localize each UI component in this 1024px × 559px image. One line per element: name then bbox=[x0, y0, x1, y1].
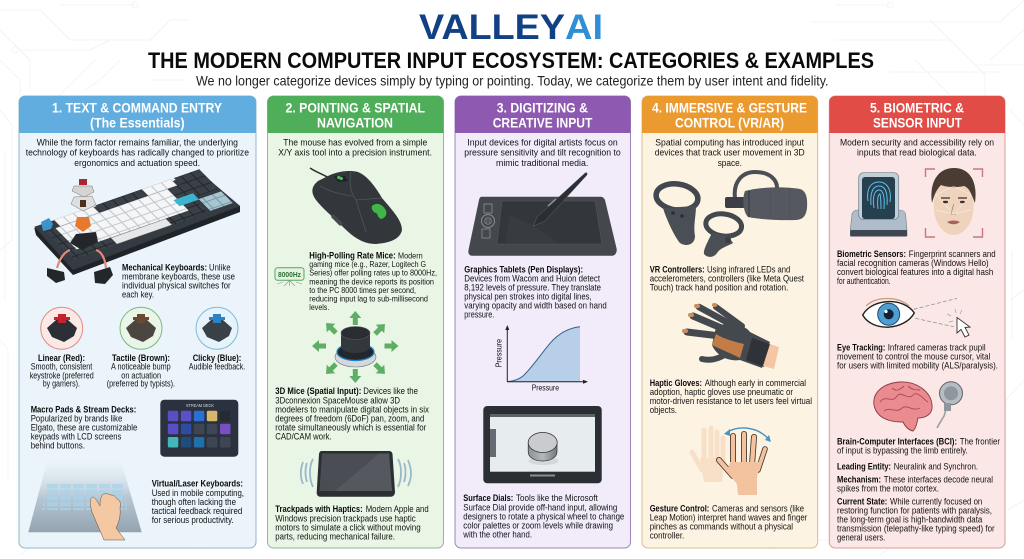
panel 1 body bbox=[19, 96, 256, 548]
text: biometric sensors: Fingerprint scanners and bbox=[909, 249, 996, 259]
text: leading entity bbox=[837, 462, 978, 472]
text: VR controllers: Using infrared LEDs and bbox=[707, 264, 790, 274]
text: mechanism: spikes from the motor cortex. bbox=[837, 484, 939, 494]
panel 4 header: 4. IMMERSIVE & GESTURE bbox=[652, 100, 807, 116]
text: linear switch: Smooth, consistent bbox=[31, 362, 93, 372]
text: high polling rate mice: levels. bbox=[309, 302, 329, 312]
text: haptic gloves: motor-driven resistance to let users feel virtual bbox=[650, 396, 812, 406]
text: gesture control: Leap Motion) interpret hand waves and finger bbox=[650, 512, 807, 522]
text: 3D mice: 3Dconnexion SpaceMouse allow 3D bbox=[275, 395, 400, 405]
text: gesture control: pinches as commands without a physical bbox=[650, 521, 793, 531]
panel: text and command entry bbox=[19, 96, 256, 548]
text: gesture control: controller. bbox=[650, 530, 684, 540]
text: brain computer interfaces: of input is bypassing the limb entirely. bbox=[837, 446, 968, 456]
text: graphics tablets: 8,192 levels of pressure. They translate bbox=[464, 282, 601, 292]
text: tactile switch: Tactile (Brown): bbox=[112, 353, 170, 363]
text: macro pads: behind buttons. bbox=[31, 441, 85, 451]
chart: pressure curve bbox=[495, 325, 588, 393]
text: trackpads with haptics: Windows precision trackpads use haptic bbox=[275, 513, 416, 523]
icon: red switch bbox=[41, 307, 83, 349]
panel 2 header: 2. POINTING & SPATIAL bbox=[286, 100, 425, 116]
icon: graphics tablet and pen bbox=[468, 173, 617, 256]
text: clicky switch bbox=[189, 353, 245, 372]
text: biometric sensors: facial recognition cameras (Windows Hello) bbox=[837, 258, 989, 268]
panel 4 body bbox=[642, 96, 818, 548]
text: surface dials: Surface Dials: bbox=[463, 493, 513, 503]
text: gesture control: Gesture Control: bbox=[650, 503, 709, 513]
panel 4 intro text: Spatial computing has introduced input bbox=[655, 138, 804, 149]
text: current state bbox=[837, 496, 995, 543]
panel 5 header: SENSOR INPUT bbox=[873, 115, 962, 131]
panel 5 body bbox=[829, 96, 1005, 548]
text: mechanical keyboards bbox=[122, 262, 235, 299]
text: haptic gloves: adoption, haptic gloves use pneumatic or bbox=[650, 387, 793, 397]
text: mechanical keyboards: membrane keyboards, these use bbox=[122, 271, 235, 281]
icon: VR controller left bbox=[654, 181, 700, 245]
text: surface dials: Tools like the Microsoft bbox=[516, 493, 598, 503]
panel: immersive and gesture control bbox=[642, 96, 818, 548]
panel 5 intro text: Modern security and accessibility rely on bbox=[840, 138, 994, 149]
text: graphics tablets: physical pen strokes into digital lines, bbox=[464, 291, 592, 301]
text: trackpads with haptics: parts, reducing mechanical failure. bbox=[275, 531, 395, 541]
text: VR controllers: VR Controllers: bbox=[650, 264, 705, 274]
icon: haptic glove bbox=[684, 305, 779, 369]
icon: eye tracking bbox=[863, 298, 970, 337]
logo: VALLEYAI: VALLEY bbox=[419, 8, 565, 47]
text: current state: the long-term goal is high-bandwidth data bbox=[837, 514, 982, 524]
text: haptic gloves: Haptic Gloves: bbox=[650, 378, 702, 388]
icon: fingerprint scanner bbox=[850, 173, 907, 236]
panel 3 header: 3. DIGITIZING & bbox=[497, 100, 588, 116]
title: THE MODERN COMPUTER INPUT ECOSYSTEM: CATEGORIES & EXAMPLES bbox=[148, 48, 874, 73]
text: tactile switch: A noticeable bump bbox=[111, 362, 171, 372]
text: macro pads bbox=[31, 404, 137, 451]
text: gesture control: Cameras and sensors (like bbox=[712, 503, 804, 513]
text: macro pads: Macro Pads & Stream Decks: bbox=[31, 404, 136, 414]
text: biometric sensors: for authentication. bbox=[837, 276, 891, 286]
text: mechanical keyboards: Unlike bbox=[209, 262, 230, 272]
panel 2 header: NAVIGATION bbox=[317, 115, 393, 131]
text: clicky switch: Clicky (Blue): bbox=[193, 353, 241, 363]
panel 1 header bbox=[19, 96, 256, 133]
text: high polling rate mice: High-Polling Rate Mice: bbox=[309, 250, 396, 260]
icon: VR controller right bbox=[704, 212, 743, 257]
text: clicky switch: Audible feedback. bbox=[189, 362, 245, 372]
text: mechanical keyboards: each key. bbox=[122, 289, 154, 299]
text: brain computer interfaces: The frontier bbox=[960, 437, 1000, 447]
panel 4 header bbox=[642, 96, 818, 133]
panel 1 intro text: technology of keyboards has radically changed to prioritize bbox=[26, 148, 249, 159]
text: trackpads with haptics: motors to simulate a click without moving bbox=[275, 522, 421, 532]
text: current state: restoring function for patients with paralysis, bbox=[837, 505, 992, 515]
text: virtual laser keyboards: for serious productivity. bbox=[152, 515, 234, 525]
panel 2 intro text: X/Y axis tool into a precision instrument. bbox=[278, 148, 432, 159]
text: leading entity: Neuralink and Synchron. bbox=[894, 462, 978, 472]
logo: VALLEYAI: AI bbox=[565, 8, 603, 47]
panel 3 intro text: Input devices for digital artists focus on bbox=[467, 138, 618, 149]
panel 2 body bbox=[268, 96, 444, 548]
text: eye tracking: Eye Tracking: bbox=[837, 342, 885, 352]
chart: pressure curve: Pressure bbox=[495, 339, 504, 367]
icon: stream deck bbox=[160, 400, 238, 457]
text: mechanism: These interfaces decode neural bbox=[884, 475, 993, 485]
text: virtual laser keyboards: though often lacking the bbox=[152, 497, 236, 507]
text: 3D mice: degrees of freedom (6DoF) pan, zoom, and bbox=[275, 413, 424, 423]
text: 3D mice: rotate simultaneously which is essential for bbox=[275, 422, 426, 432]
panel 3 header bbox=[455, 96, 630, 133]
text: haptic gloves: objects. bbox=[650, 405, 677, 415]
panel 5 header: 5. BIOMETRIC & bbox=[870, 100, 964, 116]
text: mechanical keyboards: individual physical switches for bbox=[122, 280, 231, 290]
text: graphics tablets bbox=[464, 265, 607, 319]
panel 1 header: (The Essentials) bbox=[90, 115, 185, 131]
icon: gesture control hands bbox=[692, 428, 771, 495]
text: graphics tablets: pressure. bbox=[464, 309, 494, 319]
text: VR controllers: accelerometers, controllers (like Meta Quest bbox=[650, 273, 804, 283]
text: graphics tablets: Graphics Tablets (Pen Displays): bbox=[464, 265, 583, 275]
panel: pointing and spatial navigation bbox=[268, 96, 444, 548]
panel: digitizing and creative input bbox=[455, 96, 630, 548]
text: biometric sensors: convert biological features into a digital hash bbox=[837, 267, 993, 277]
panel 3 intro text bbox=[464, 138, 621, 169]
text: mechanism: Mechanism: bbox=[837, 475, 881, 485]
text: high polling rate mice: Modern bbox=[398, 251, 423, 260]
text: tactile switch bbox=[107, 353, 175, 389]
panel 1 intro text: ergonomics and actuation speed. bbox=[74, 158, 200, 169]
panel 5 header bbox=[829, 96, 1005, 133]
text: surface dials: with the other hand. bbox=[462, 529, 532, 539]
panel 4 intro text: space. bbox=[718, 158, 742, 169]
icon: 3D mouse with arrows bbox=[312, 311, 398, 383]
icon: 8000Hz polling badge bbox=[275, 268, 304, 286]
icon: stream deck: STREAM DECK bbox=[186, 403, 214, 408]
chart: pressure curve: Pressure bbox=[532, 384, 559, 393]
icon: blue switch bbox=[196, 307, 238, 349]
text: graphics tablets: Devices from Wacom and Huion detect bbox=[464, 274, 600, 284]
text: trackpads with haptics: Trackpads with Haptics: bbox=[275, 504, 363, 514]
icon: mechanical keyboard bbox=[34, 169, 240, 284]
text: eye tracking: Infrared cameras track pupil bbox=[888, 342, 986, 352]
text: mechanical keyboards: Mechanical Keyboards: bbox=[122, 262, 207, 272]
icon: 8000Hz polling badge: 8000Hz bbox=[278, 270, 301, 279]
text: current state: transmission (telepathy-like typing speed) for bbox=[837, 524, 995, 534]
text: 3D mice bbox=[275, 386, 429, 441]
icon: haptic trackpad bbox=[301, 451, 411, 497]
text: macro pads: Popularized by brands like bbox=[31, 414, 122, 424]
text: linear switch bbox=[30, 353, 94, 389]
text: 3D mice: Devices like the bbox=[363, 386, 418, 396]
text: surface dials bbox=[462, 493, 624, 539]
panel: biometric and sensor input bbox=[829, 96, 1005, 548]
text: virtual laser keyboards: tactical feedback required bbox=[152, 506, 242, 516]
panel 3 intro text: pressure sensitivity and tilt recognition to bbox=[464, 148, 621, 159]
panel 5 intro text bbox=[840, 138, 994, 159]
panel 1 header: 1. TEXT & COMMAND ENTRY bbox=[52, 100, 223, 116]
text: high polling rate mice: Series) offer polling rates up to 8000Hz, bbox=[309, 268, 437, 278]
text: linear switch: Linear (Red): bbox=[38, 353, 85, 363]
icon: tablet with surface dial bbox=[483, 406, 602, 483]
text: surface dials: designers to rotate a physical wheel to change bbox=[463, 511, 624, 521]
text: current state: general users. bbox=[837, 533, 885, 543]
text: high polling rate mice bbox=[309, 250, 437, 312]
panel 2 intro text: The mouse has evolved from a simple bbox=[283, 138, 427, 149]
text: macro pads: Elgato, these are customizable bbox=[31, 423, 137, 433]
text: biometric sensors bbox=[837, 249, 996, 286]
text: high polling rate mice: meaning the device reports its position bbox=[309, 276, 434, 286]
text: virtual laser keyboards bbox=[152, 479, 244, 525]
text: mechanism bbox=[837, 475, 993, 494]
text: eye tracking bbox=[837, 342, 998, 370]
text: surface dials: Surface Dial provide off-hand input, allowing bbox=[463, 502, 617, 512]
text: graphics tablets: varying opacity and width based on hand bbox=[464, 300, 607, 310]
panel 4 intro text bbox=[655, 138, 805, 169]
text: current state: Current State: bbox=[837, 496, 887, 506]
icon: virtual laser keyboard bbox=[28, 463, 142, 540]
text: macro pads: keypads with LCD screens bbox=[31, 432, 122, 442]
text: gesture control bbox=[650, 503, 807, 540]
text: haptic gloves: Although early in commercial bbox=[705, 378, 806, 388]
text: tactile switch: on actuation bbox=[121, 370, 161, 380]
text: VR controllers bbox=[650, 264, 804, 292]
text: trackpads with haptics bbox=[275, 504, 429, 541]
text: high polling rate mice: gaming mice (e.g., Razer, Logitech G bbox=[309, 259, 426, 269]
text: high polling rate mice: reducing input lag to sub-millisecond bbox=[309, 294, 428, 304]
text: VR controllers: Touch) track hand position and rotation. bbox=[650, 282, 788, 292]
text: virtual laser keyboards: Used in mobile computing, bbox=[152, 488, 244, 498]
panel 2 intro text bbox=[278, 138, 432, 159]
text: virtual laser keyboards: Virtual/Laser Keyboards: bbox=[152, 479, 243, 489]
text: trackpads with haptics: Modern Apple and bbox=[366, 504, 429, 514]
panel 1 intro text: While the form factor remains familiar, the underlying bbox=[37, 138, 238, 149]
text: high polling rate mice: to the PC 8000 times per second, bbox=[309, 285, 416, 295]
panel 3 header: CREATIVE INPUT bbox=[493, 115, 593, 131]
text: surface dials: color palettes or zoom levels while drawing bbox=[463, 520, 613, 530]
text: 3D mice: 3D Mice (Spatial Input): bbox=[275, 386, 361, 396]
subtitle: We no longer categorize devices simply by typing or pointing. Today, we categorize them by user intent and fidelity. bbox=[196, 72, 828, 88]
panel 4 header: CONTROL (VR/AR) bbox=[675, 115, 784, 131]
panel 2 header bbox=[268, 96, 444, 133]
text: haptic gloves bbox=[650, 378, 812, 415]
panel 1 intro text bbox=[26, 138, 249, 169]
icon: brain with electrode bbox=[874, 382, 962, 431]
text: leading entity: Leading Entity: bbox=[837, 462, 891, 472]
icon: brown switch bbox=[120, 307, 162, 349]
panel 3 body bbox=[455, 96, 630, 548]
text: biometric sensors: Biometric Sensors: bbox=[837, 249, 906, 259]
text: linear switch: by gamers). bbox=[43, 379, 80, 389]
text: 3D mice: CAD/CAM work. bbox=[275, 431, 332, 441]
text: tactile switch: (preferred by typists). bbox=[107, 379, 175, 389]
panel 3 intro text: mimic traditional media. bbox=[496, 158, 588, 169]
icon: facial recognition bbox=[926, 168, 982, 237]
panel 4 intro text: devices that track user movement in 3D bbox=[655, 148, 805, 159]
text: 3D mice: modelers to manipulate digital objects in six bbox=[275, 404, 429, 414]
text: eye tracking: movement to control the mouse cursor, vital bbox=[837, 351, 990, 361]
text: linear switch: keystroke (preferred bbox=[30, 370, 94, 380]
panel 5 intro text: inputs that read biological data. bbox=[857, 148, 977, 159]
text: current state: While currently focused on bbox=[890, 496, 982, 506]
text: eye tracking: for users with limited mobility (ALS/paralysis). bbox=[837, 360, 998, 370]
text: brain computer interfaces: Brain-Computer Interfaces (BCI): bbox=[837, 437, 957, 447]
text: brain computer interfaces bbox=[837, 437, 1000, 456]
icon: gaming mouse bbox=[310, 168, 402, 244]
icon: VR headset bbox=[725, 172, 807, 220]
